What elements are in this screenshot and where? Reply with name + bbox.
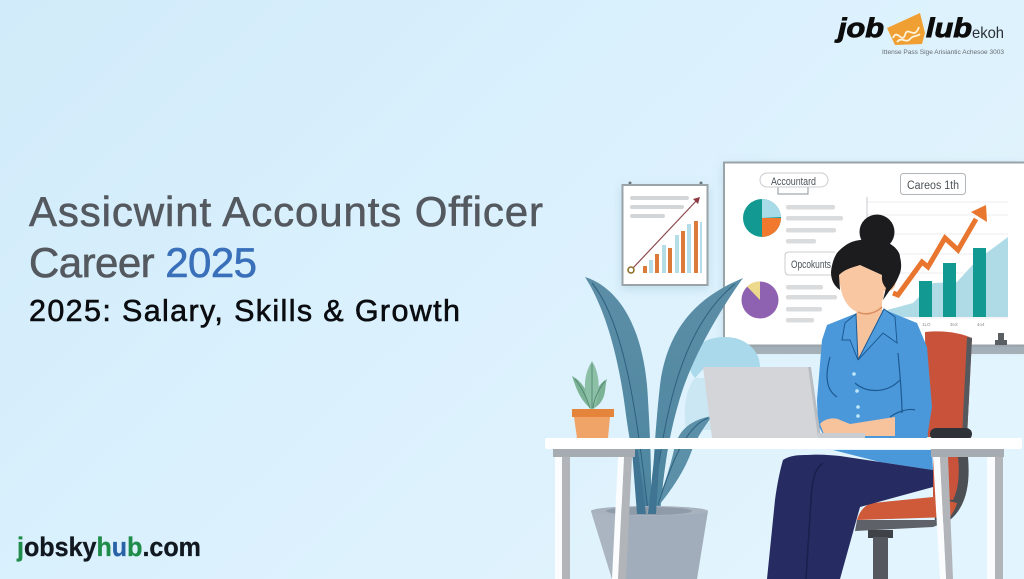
top right logo: job xyxy=(835,13,884,43)
forearm and hands xyxy=(820,417,895,437)
label: Opcokunts: Opcokunts xyxy=(791,259,831,271)
desk top xyxy=(545,438,1022,449)
top right logo: Ittense Pass Sige Arisiantic Achesoe 3003 xyxy=(882,49,1004,56)
hair bun xyxy=(860,214,894,250)
title: Career 2025 xyxy=(29,239,257,286)
large potted plant xyxy=(585,277,743,579)
line and bar chart: 3rol xyxy=(950,322,958,327)
text lines: first pie xyxy=(786,205,843,244)
title: Assicwint Accounts Officer xyxy=(29,188,543,235)
label: Opcokunts xyxy=(785,252,840,275)
neck xyxy=(856,300,882,360)
pie chart: teal orange blue xyxy=(743,199,781,237)
chair post xyxy=(868,530,893,579)
whiteboard xyxy=(723,162,1024,354)
text lines: second pie xyxy=(786,285,837,322)
desk xyxy=(545,438,1022,579)
light blue cloud shape xyxy=(685,337,760,430)
laptop xyxy=(703,367,865,438)
collar xyxy=(842,309,897,360)
shirt cuff xyxy=(895,410,928,437)
desk legs xyxy=(555,457,1003,579)
chair back xyxy=(925,331,972,437)
plant leaves xyxy=(585,277,743,514)
label: Careers box xyxy=(900,174,966,194)
label: Accountard xyxy=(760,173,828,194)
ear xyxy=(878,274,896,292)
top right logo xyxy=(835,13,1004,56)
office chair xyxy=(855,331,972,579)
line and bar chart xyxy=(867,197,1008,327)
chair seat xyxy=(857,497,957,520)
whiteboard stand xyxy=(995,333,1007,345)
shirt xyxy=(817,310,933,470)
jaw shadow xyxy=(858,307,882,314)
armrest xyxy=(930,428,972,440)
label: Accountard: Accountard xyxy=(771,176,816,188)
title: 2025: Salary, Skills & Growth xyxy=(29,294,460,328)
bottom left site name: jobskyhub.com xyxy=(16,532,201,562)
woman at desk xyxy=(767,214,933,579)
line and bar chart: 1LO xyxy=(922,322,931,327)
hair xyxy=(831,239,901,300)
trousers xyxy=(767,455,933,579)
title xyxy=(29,188,543,328)
plant pot xyxy=(591,450,708,579)
face xyxy=(839,265,884,312)
pie chart: purple xyxy=(742,281,778,318)
top right logo: lub xyxy=(926,13,972,43)
top right logo: ekoh xyxy=(972,25,1004,42)
label: Careers box: Careos 1th xyxy=(907,180,959,192)
small potted plant xyxy=(572,361,614,438)
wall poster xyxy=(622,182,708,285)
line and bar chart: 4o4 xyxy=(977,322,985,327)
